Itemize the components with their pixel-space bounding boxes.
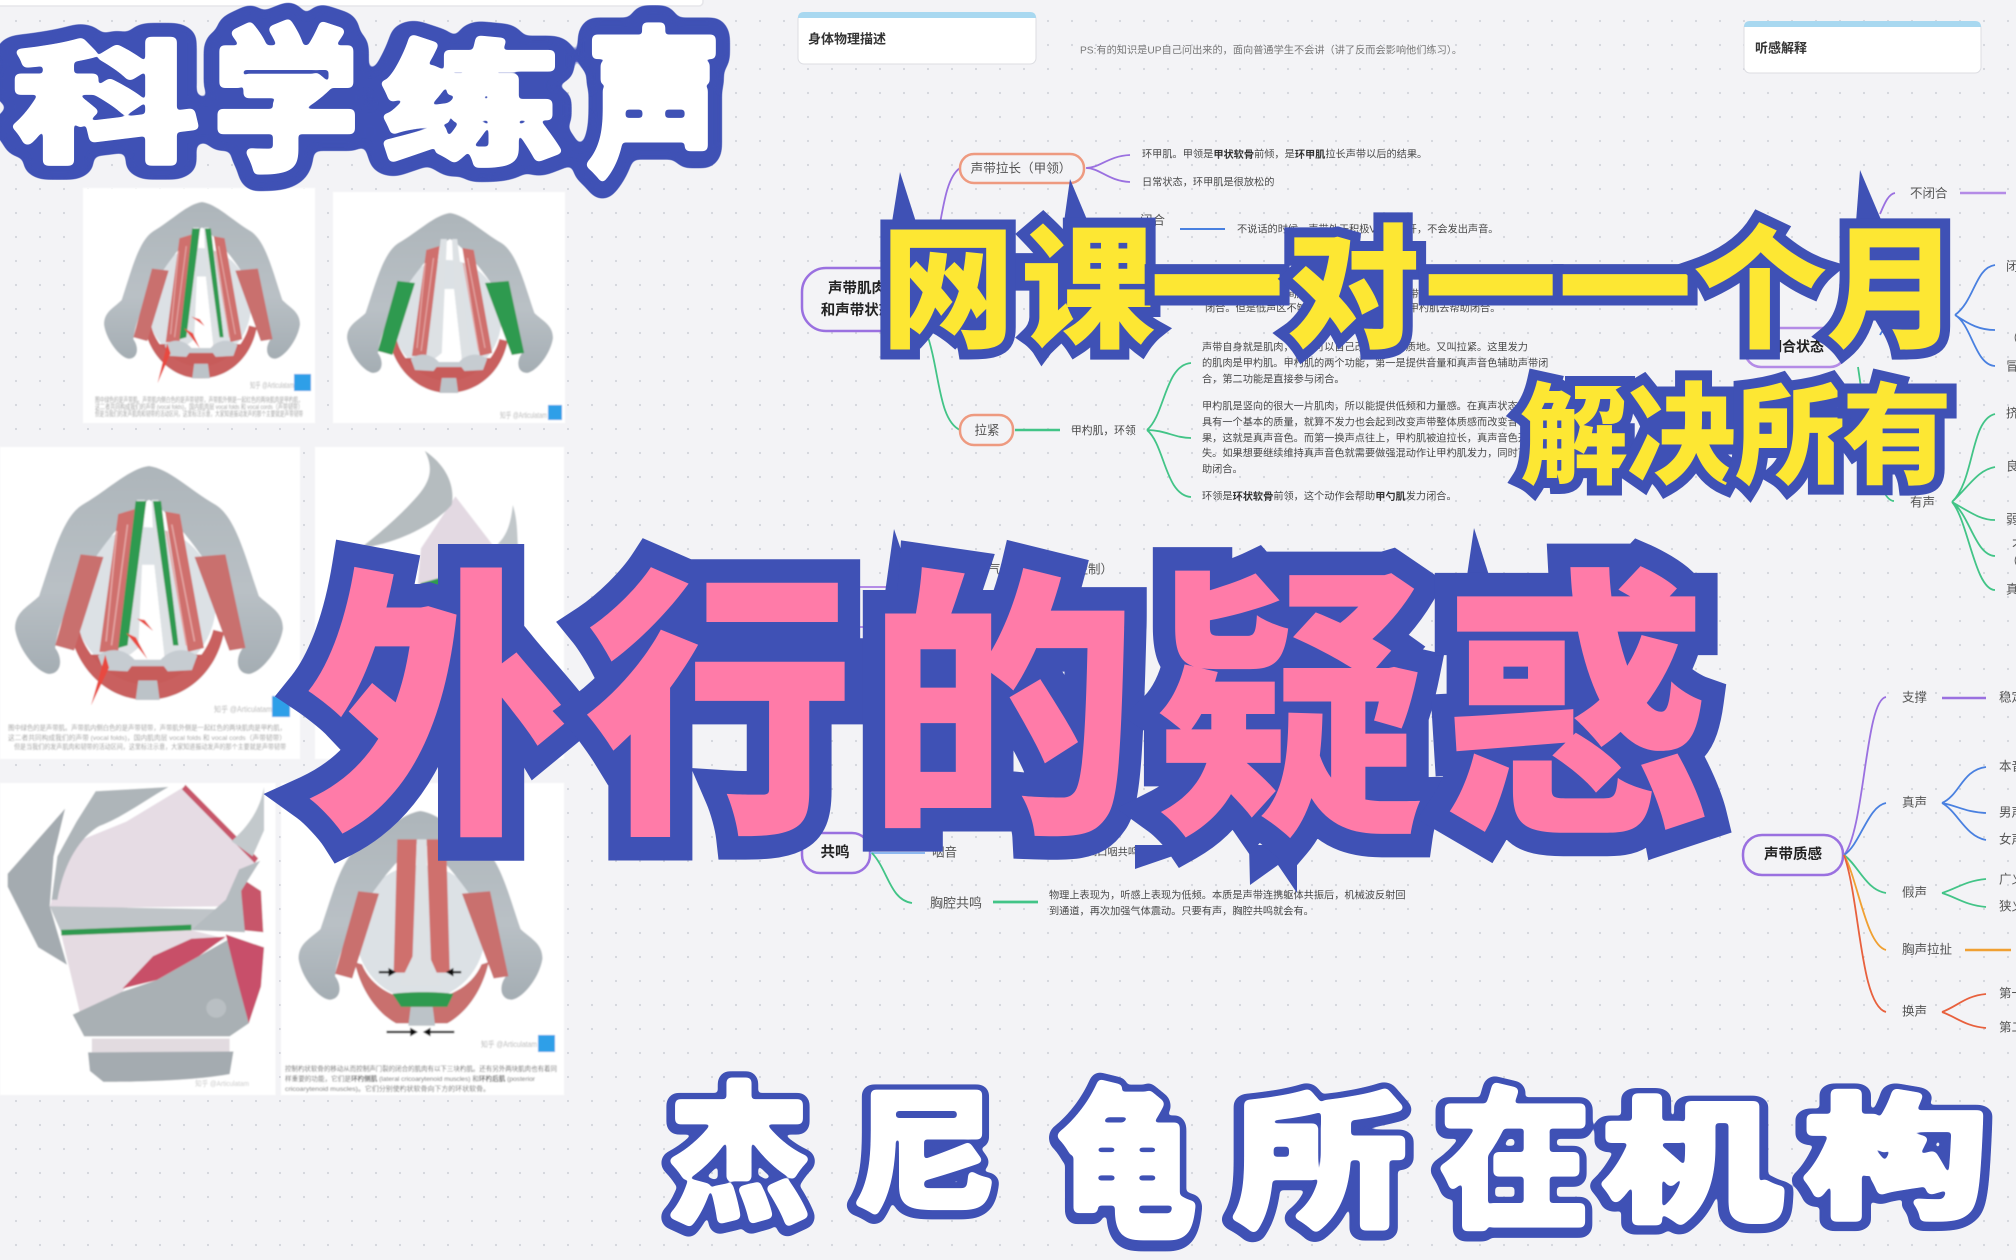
footer title: 杰尼龟所在机构: 构: [1803, 1088, 1987, 1237]
image panel C: enlarged vocal folds: 但是当我们的发声肌肉和韧带的活动区间，这里标注示意，大家知道振动发声的那个主要就是声带韧带: [14, 742, 286, 751]
text: 甲杓肌 notes: 甲杓肌是竖向的很大一片肌肉，所以能提供低频和力量感。在真声状态，声带: [1202, 400, 1548, 413]
image panel C: enlarged vocal folds: [0, 447, 300, 759]
mind map right: 声带质感: [1743, 689, 2016, 1034]
text: 闭合: 闭合。但是低声区不够用，声带很厚，则需要甲杓肌去帮助闭合。: [1205, 302, 1500, 315]
footer title: 杰尼龟所在机构: [668, 1074, 1988, 1260]
mind map left: vocal fold muscles: [802, 148, 1551, 503]
title: 科学练声: 学: [213, 16, 359, 190]
title: 科学练声: 声: [588, 19, 720, 197]
image panel C: enlarged vocal folds: 知乎 @Articulatam: [214, 704, 272, 714]
image panel A: vocal folds with green highlight: 知乎 @Articulatam: [250, 380, 294, 390]
node: 声带质感: 声带质感: [1764, 845, 1822, 863]
image panel F: closed vocal folds: [281, 783, 564, 1095]
card: 身体物理描述: 身体物理描述: [808, 31, 886, 46]
text: 胸腔共鸣 note: 到通道，再次加强气体震动。只要有声，胸腔共鸣就会有。: [1049, 905, 1314, 918]
card: 听感解释: [1744, 21, 1981, 73]
top white strip: [0, 0, 703, 6]
image panel C: enlarged vocal folds: 图中绿色的是声带肌。声带肌内侧白色的是声带韧带，声带肌外侧是一起红色的两块肌肉是甲杓肌，: [8, 723, 286, 732]
mind map lower centre: breath and resonance: 气息支撑（呼吸控制）: [988, 561, 1113, 576]
text: 甲杓肌 notes: [1202, 341, 1548, 503]
note: PS text: PS:有的知识是UP自己问出来的，面向普通学生不会讲（讲了反而会影响他们练习）。: [1080, 44, 1462, 57]
node: 拉紧: 拉紧: [974, 422, 1000, 437]
spikes: main heading outline: [884, 528, 1500, 893]
text: 闭合: 杓肌: [1130, 229, 1156, 244]
text: 胸腔共鸣 note: 物理上表现为，听感上表现为低频。本质是声带连携躯体共振后，机械波反射回: [1049, 889, 1406, 902]
mind map lower centre: breath and resonance: 鼓起软腭，提高口咽共鸣空间: [1026, 846, 1158, 859]
image panel F: closed vocal folds: 样重要的功能，它们是环杓侧肌 (lateral cricoarytenoid muscles) 和环杓后肌 (posterior: [285, 1074, 536, 1083]
title: 科学练声: 科: [14, 33, 198, 178]
connector stub behind title: [560, 60, 580, 62]
text: 环甲肌 notes: 日常状态，环甲肌是很放松的: [1142, 176, 1274, 189]
image panel A: vocal folds with green highlight: 这二者共同构成我们的声带 (vocal folds)，国内肌肉层 vocal folds 和 vocal cords（声带韧带）: [95, 402, 303, 411]
footer title: 杰尼龟所在机构: 构: [1804, 1086, 1988, 1235]
text: 甲杓肌 notes: 具有一个基本的质量，就算不发力也会起到改变声带整体质感而改变音色的效: [1202, 416, 1548, 429]
footer title: 杰尼龟所在机构: 龟: [1059, 1076, 1195, 1260]
node: 声带肌肉和声带状态: 声带肌肉: [828, 279, 886, 297]
image panel B: lateral muscles in green: 知乎 @Articulatam: [500, 410, 547, 420]
mind map right: 声带质感: 胸声拉扯: [1902, 941, 1952, 956]
footer title: 杰尼龟所在机构: 在: [1441, 1079, 1589, 1246]
text: 甲杓肌 notes: 合，第二功能是直接参与闭合。: [1202, 373, 1345, 386]
text: 胸腔共鸣 note: [1049, 889, 1406, 918]
footer title: 杰尼龟所在机构: 机: [1602, 1090, 1782, 1238]
card: 身体物理描述: [798, 12, 1036, 64]
node: 声带拉长: [960, 154, 1084, 183]
footer title: 杰尼龟所在机构: 尼: [853, 1081, 997, 1228]
node: 拉紧: [960, 415, 1013, 445]
image panel F: closed vocal folds: 控制杓状软骨的移动从而控制声门裂的闭合的肌肉有以下三块杓肌。还有另外两块肌肉也有着同: [285, 1064, 557, 1073]
mind map right: 声带质感: 假声: [1902, 885, 1927, 899]
mind map left: vocal fold muscles: 甲杓肌，环领: [1071, 423, 1136, 437]
node: 闭合状态: [1745, 328, 1846, 367]
text: 闭合: 声门闭合主要靠杓间肌和环杓侧肌，可以把声带拉到一起，高声区就能够完成: [1205, 288, 1551, 301]
text: 甲杓肌 notes: 环领是环状软骨前领，这个动作会帮助甲勺肌发力闭合。: [1202, 490, 1457, 503]
footer title: 杰尼龟所在机构: 龟: [1058, 1078, 1194, 1260]
title: 科学练声: 练: [382, 33, 562, 181]
text: 甲杓肌 notes: 声带自身就是肌肉，所以可以自己改变自己的质地。又叫拉紧。这里发力: [1202, 341, 1528, 354]
mind map right: closure state: 不闭合: [1910, 185, 1948, 200]
image panel A: vocal folds with green highlight: [83, 188, 315, 423]
heading: 网课一对一一个月: 网课一对一一个月: [881, 217, 1960, 366]
image panel E: larynx side view: [0, 783, 276, 1095]
image panel D: epiglottis side view: [315, 447, 564, 759]
text: 甲杓肌 notes: 的肌肉是甲杓肌。甲杓肌的两个功能，第一是提供音量和真声音色辅助声带闭: [1202, 357, 1548, 370]
footer title: 杰尼龟所在机构: 机: [1601, 1092, 1781, 1240]
node: 闭合状态: 闭合状态: [1768, 339, 1824, 355]
mind map right: 声带质感: 换声: [1902, 1004, 1927, 1018]
image panel A: vocal folds with green highlight: 但是当我们的发声肌肉和韧带的活动区间，这里标注示意，大家知道振动发声的那个主要就是声带韧带: [95, 409, 303, 418]
node: 共鸣: [802, 833, 870, 873]
heading: 解决所有: 解决所有: [1520, 376, 1952, 499]
mind map lower centre: breath and resonance: [802, 561, 1406, 918]
text: 闭合: 不说话的时候，声带处于积极V字形打开，不会发出声音。: [1237, 223, 1498, 236]
text: 闭合: 闭合: [1140, 212, 1166, 227]
text: 甲杓肌 notes: 助闭合。: [1202, 463, 1243, 476]
node: 声带肌肉和声带状态: [802, 268, 922, 331]
node: upper pill: [820, 587, 940, 627]
mind map right: closure state: [1745, 185, 2016, 596]
spikes: heading outline: [892, 170, 1882, 222]
text: 环甲肌 notes: [1142, 148, 1427, 189]
node: 声带质感: [1743, 835, 1843, 875]
main heading: 外行的疑惑: 外行的疑惑: [305, 553, 1711, 870]
text: 环甲肌 notes: 环甲肌。甲领是甲状软骨前倾，是环甲肌拉长声带以后的结果。: [1142, 148, 1427, 161]
footer title: 杰尼龟所在机构: 在: [1440, 1081, 1588, 1248]
mind map right: closure state: 有声: [1910, 495, 1935, 509]
title: 科学练声: 学: [213, 16, 359, 190]
image panel E: larynx side view: 知乎 @Articulatam: [195, 1079, 249, 1088]
node: 声带拉长: 声带拉长（甲领）: [971, 161, 1071, 175]
node: 共鸣: 共鸣: [820, 844, 850, 861]
node: 声带肌肉和声带状态: 和声带状态: [821, 301, 894, 319]
image panel C: enlarged vocal folds: 这二者共同构成我们的声带 (vocal folds)，国内肌肉层 vocal folds 和 vocal cords（声带韧带）: [8, 733, 286, 742]
mind map right: 声带质感: 支撑: [1902, 689, 1928, 704]
title: 科学练声: [14, 16, 720, 197]
image panel B: lateral muscles in green: [333, 192, 565, 423]
footer title: 杰尼龟所在机构: 所: [1233, 1085, 1405, 1248]
card: 听感解释: 听感解释: [1755, 40, 1807, 55]
image panel F: closed vocal folds: cricoarytenoid muscles)。它们分别使杓状软骨向下方的环状软骨。: [285, 1084, 490, 1093]
title: 科学练声: 科: [14, 33, 198, 178]
mind map right: 声带质感: 真声: [1902, 795, 1927, 809]
mind map lower centre: breath and resonance: 咽音: [932, 844, 957, 859]
footer title: 杰尼龟所在机构: 尼: [852, 1083, 996, 1230]
title: 科学练声: 练: [382, 33, 562, 181]
text: 甲杓肌 notes: 果，这就是真声音色。而第一换声点往上，甲杓肌被迫拉长，真声音色开始消: [1202, 432, 1548, 445]
footer title: 杰尼龟所在机构: 杰: [668, 1076, 808, 1243]
node: 胸腔共鸣: 胸腔共鸣: [930, 895, 982, 910]
image panel A: vocal folds with green highlight: 图中绿色的是声带肌。声带肌内侧白色的是声带韧带，声带肌外侧是一起红色的两块肌肉是甲杓肌，: [95, 395, 303, 404]
footer title: 杰尼龟所在机构: 所: [1234, 1083, 1406, 1246]
text: 闭合: [1130, 212, 1551, 315]
text: 甲杓肌 notes: 失。如果想要继续维持真声音色就需要做强混动作让甲杓肌发力，同时可以帮: [1202, 447, 1548, 460]
title: 科学练声: 声: [588, 19, 720, 197]
footer title: 杰尼龟所在机构: 杰: [669, 1074, 809, 1241]
image panel F: closed vocal folds: 知乎 @Articulatam: [481, 1039, 537, 1049]
